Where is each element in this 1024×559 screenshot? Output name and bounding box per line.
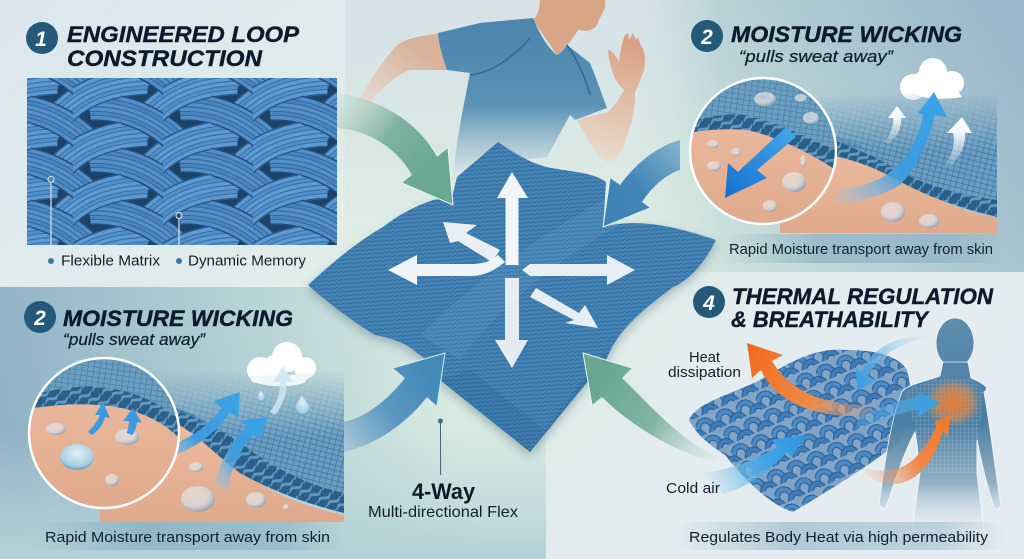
badge 2 [691, 20, 723, 52]
tagline: pulls sweat away: “pulls sweat away” [739, 48, 895, 66]
label: dynamic memory [176, 212, 307, 270]
arrow: blue lower left [343, 353, 445, 452]
arrow: air in from top [856, 336, 927, 390]
panel: moisture wicking top right [680, 20, 1005, 263]
cloud [900, 58, 964, 100]
label: heat dissipation: Heat [689, 349, 721, 366]
caption band and text [35, 522, 345, 550]
wicking arrows blue [143, 392, 268, 490]
callout: 4-way flex: 4-Way [412, 479, 476, 504]
arrow into skin [725, 127, 796, 198]
arrow: blue top right [603, 140, 680, 227]
badge 4 [693, 286, 725, 318]
evaporation arrows white [884, 106, 972, 168]
caption band and text [675, 522, 1005, 550]
woven fibre close-up image [27, 78, 337, 245]
badge 1 [26, 22, 58, 54]
heading: engineered loop construction: ENGINEERED LOOP [67, 22, 300, 47]
badge 4: 4 [702, 292, 715, 315]
heading: thermal regulation and breathability: THERMAL REGULATION [732, 284, 994, 309]
arrow: warm air to chest [865, 415, 950, 484]
arrow: green lower right [583, 353, 717, 462]
label: flexible matrix: Flexible Matrix [61, 252, 161, 270]
stretch arrow up [497, 172, 528, 265]
callout: 4-way flex: Multi-directional Flex [368, 504, 518, 521]
stretch arrow south-east [530, 288, 598, 328]
wicking arrow large blue [837, 92, 947, 203]
caption band and text: Regulates Body Heat via high permeability [689, 529, 989, 546]
caption band and text [720, 234, 1005, 263]
runner back arm [340, 33, 447, 157]
callout: 4-way flex [368, 418, 518, 521]
heading: thermal regulation and breathability [731, 284, 994, 332]
caption band and text: Rapid Moisture transport away from skin [729, 241, 993, 258]
runner head and neck [533, 0, 605, 55]
knit mesh structure [689, 350, 911, 512]
badge 1: 1 [35, 28, 47, 51]
stretch arrow left [388, 255, 505, 285]
label: flexible matrix [48, 176, 161, 270]
magnified circle [25, 350, 185, 510]
runner shirt [438, 18, 607, 177]
heading: moisture wicking: MOISTURE WICKING [63, 306, 293, 331]
panel: moisture wicking lower left [24, 301, 345, 550]
caption band and text: Rapid Moisture transport away from skin [45, 529, 330, 546]
arrow: heat dissipation [747, 343, 872, 416]
arrow: cold air [703, 435, 805, 494]
runner in blue shirt [340, 0, 645, 177]
human figure [879, 318, 1001, 530]
tagline: pulls sweat away: “pulls sweat away” [63, 331, 207, 349]
badge 2 [24, 301, 56, 333]
central fabric swatch [308, 142, 716, 456]
label: heat dissipation [668, 349, 741, 381]
heading: moisture wicking: MOISTURE WICKING [731, 22, 962, 47]
heading: thermal regulation and breathability: & BREATHABILITY [731, 307, 930, 332]
arrow: air through to chest [857, 392, 940, 430]
stretch arrow right [522, 255, 635, 285]
panel: thermal regulation [666, 284, 1005, 550]
evaporation arrow pale [270, 366, 293, 415]
label: cold air: Cold air [666, 480, 720, 497]
badge 2: 2 [33, 307, 46, 330]
arrow: green top left [337, 93, 453, 205]
heading: engineered loop construction: CONSTRUCTION [67, 46, 263, 71]
small wicking arrows [88, 402, 110, 435]
panel: engineered loop construction [26, 22, 337, 268]
fabric over skin cross-section [780, 95, 997, 233]
stretch arrow down [495, 278, 528, 368]
label: heat dissipation: dissipation [668, 364, 741, 381]
magnified circle [688, 76, 838, 226]
badge 2: 2 [700, 26, 713, 49]
cloud [247, 342, 316, 386]
runner forward arm [577, 33, 645, 162]
stretch arrow north-west [443, 222, 500, 262]
label: dynamic memory: Dynamic Memory [188, 252, 307, 270]
fabric over skin cross-section [100, 372, 344, 522]
heading: engineered loop construction [67, 22, 300, 71]
rain drops [257, 390, 310, 416]
